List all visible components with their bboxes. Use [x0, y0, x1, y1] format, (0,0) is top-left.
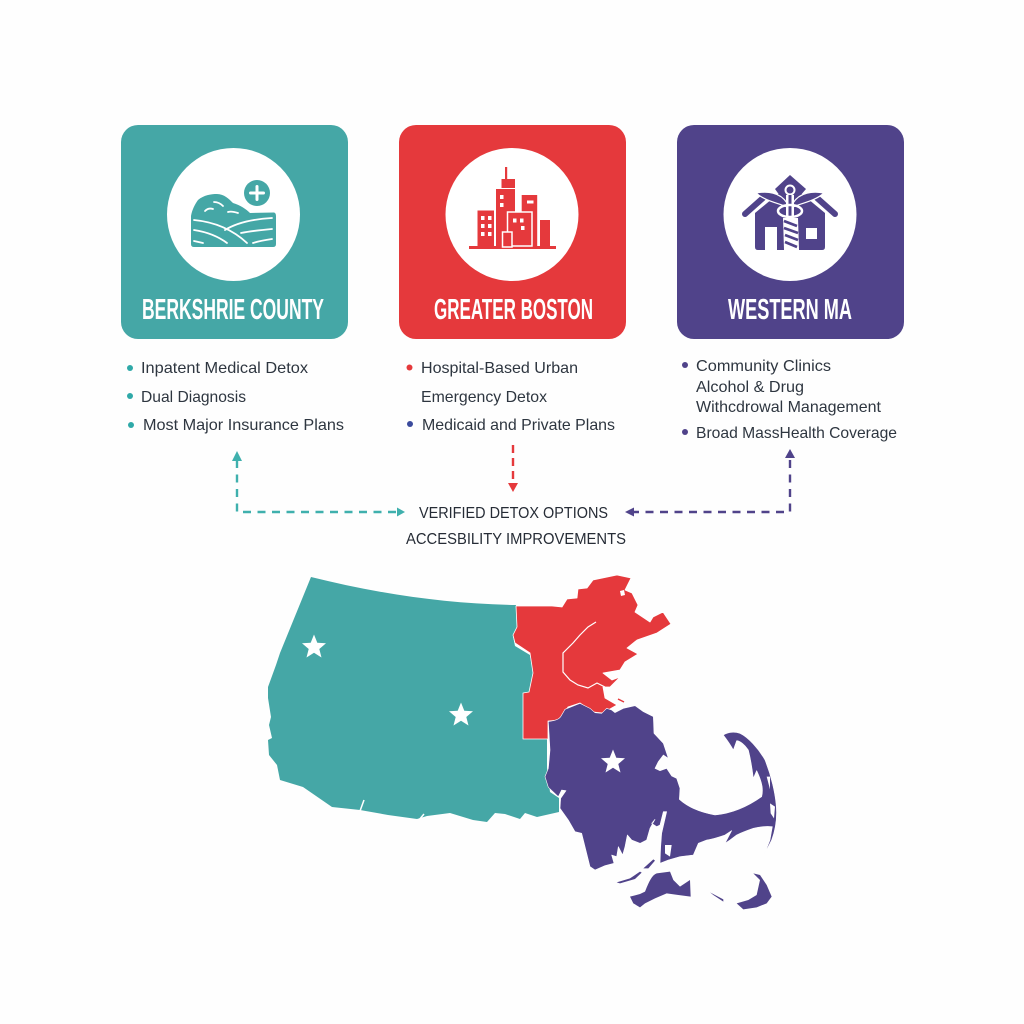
map region: northeast (red) [513, 575, 671, 739]
text block: center caption: VERIFIED DETOX OPTIONS [419, 505, 608, 522]
text block: Greater Boston services: Medicaid and Private Plans [422, 417, 615, 434]
icon: star marker southeast [601, 750, 625, 772]
heading: Western MA: WESTERN MA [728, 294, 852, 326]
map: Massachusetts regions [268, 575, 776, 909]
icon: hills with medical plus [191, 180, 276, 247]
icon: star marker central [449, 702, 473, 726]
icon: city skyline [469, 167, 556, 249]
text block: Berkshire services: Inpatent Medical Detox [141, 360, 308, 377]
arrow: red dashed connector [508, 445, 518, 492]
text block: Western MA services: Broad MassHealth Coverage [696, 425, 897, 442]
heading: Greater Boston: GREATER BOSTON [434, 294, 593, 326]
text block: Western MA services [682, 358, 897, 442]
panel: Greater Boston card [399, 125, 626, 339]
icon: star marker west [302, 634, 326, 658]
text block: Berkshire services: Dual Diagnosis [141, 389, 246, 406]
map region: southeast and Cape (purple) [545, 703, 776, 909]
text block: center caption [406, 505, 626, 548]
text block: Greater Boston services: Emergency Detox [421, 389, 547, 406]
text block: Western MA services: Alcohol & Drug [696, 379, 804, 396]
arrow: teal dashed connector [232, 451, 405, 516]
heading: Berkshrie County: BERKSHRIE COUNTY [142, 294, 324, 326]
text block: Greater Boston services: Hospital-Based Urban [421, 360, 578, 377]
text block: Berkshire services: Most Major Insurance Plans [143, 417, 344, 434]
text block: Western MA services: Withcdrowal Management [696, 399, 882, 416]
icon: house with caduceus [745, 175, 835, 250]
text block: Berkshire services [127, 360, 344, 434]
arrow: purple dashed connector [625, 449, 795, 516]
panel: Berkshire County card [121, 125, 348, 339]
text block: center caption: ACCESBILITY IMPROVEMENTS [406, 531, 626, 548]
text block: Western MA services: Community Clinics [696, 358, 831, 375]
map region: west (teal) [268, 577, 559, 822]
text block: Greater Boston services [406, 360, 615, 434]
panel: Western MA card [677, 125, 904, 339]
